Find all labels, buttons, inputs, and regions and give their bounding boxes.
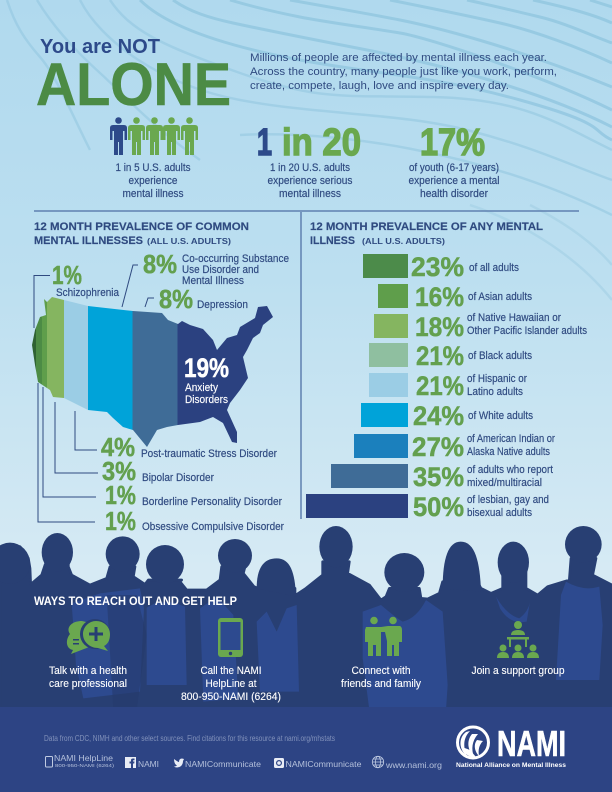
stat caption: 17%: health disorder	[420, 188, 488, 200]
action: call helpline: HelpLine at	[206, 678, 256, 690]
bar: 35% mixed	[331, 462, 553, 492]
callout: 1% schizophrenia: 1%	[52, 260, 82, 290]
stat caption: 17%: experience a mental	[408, 175, 500, 187]
bar: 23% all adults: of all adults	[469, 262, 519, 274]
intro text: Across the country, many people just like you work, perform,	[250, 66, 557, 78]
callout: 8% depression	[145, 284, 248, 314]
stat: 1 in 20: 1	[257, 122, 272, 164]
callout: 3% bipolar	[55, 402, 214, 486]
bar: 50% LGB: bisexual adults	[467, 507, 532, 519]
contact: facebook	[125, 757, 159, 769]
action: call helpline: 800-950-NAMI (6264)	[181, 691, 281, 703]
intro text: Millions of people are affected by mental illness each year.	[250, 52, 547, 64]
action: call helpline	[181, 665, 281, 703]
action: call helpline: Call the NAMI	[200, 665, 262, 677]
contact: instagram: NAMICommunicate	[286, 759, 362, 769]
callout: 1% borderline: 1%	[105, 480, 136, 510]
logo: NAMI: National Alliance on Mental Illness	[456, 762, 567, 769]
bar: 18% Native Hawaiian	[374, 312, 587, 342]
callout: 4% PTSD: 4%	[101, 432, 135, 462]
action: join group: Join a support group	[472, 665, 564, 677]
bar: 21% Hispanic: 21%	[416, 371, 464, 401]
callout: 8% co-occurring: Use Disorder and	[182, 264, 259, 276]
bar: 21% Hispanic: Latino adults	[467, 386, 523, 398]
bar: 50% LGB: 50%	[413, 492, 464, 522]
icon: phone	[218, 618, 243, 657]
bar: 21% Black	[369, 341, 532, 371]
bar: 21% Black: 21%	[416, 341, 464, 371]
callout: 19% anxiety: Disorders	[185, 394, 228, 406]
bar: 23% all adults: 23%	[411, 252, 464, 282]
bar: 27% American Indian: of American Indian or	[467, 433, 555, 445]
heading: ways to reach out: WAYS TO REACH OUT AND GET HELP	[34, 594, 237, 608]
callout: 19% anxiety: 19%	[184, 353, 229, 383]
stat caption: 1 in 5: 1 in 5 U.S. adults	[116, 162, 191, 174]
callout: 8% depression: 8%	[159, 284, 193, 314]
callout: 4% PTSD: Post-traumatic Stress Disorder	[141, 448, 277, 460]
bar: 16% Asian: 16%	[415, 282, 464, 312]
bar: 21% Hispanic	[369, 371, 527, 401]
stat caption: 1 in 5: experience	[128, 175, 178, 187]
callout: 8% co-occurring: Mental Illness	[182, 275, 244, 287]
stat caption: 1 in 5: mental illness	[122, 188, 184, 200]
callout: 1% OCD: Obsessive Compulsive Disorder	[142, 521, 284, 533]
heading: any mental illness: ILLNESS	[310, 235, 355, 247]
source note: Data from CDC, NIMH and other select sources. Find citations for this resource at nami.org/mhstats	[44, 734, 335, 743]
bar: 24% White: 24%	[413, 401, 464, 431]
heading: common mental illnesses	[34, 221, 249, 247]
intro text: create, compete, laugh, love and inspire every day.	[250, 80, 509, 92]
callout: 3% bipolar: 3%	[102, 456, 136, 486]
callout: 4% PTSD	[75, 411, 277, 462]
callout: 19% anxiety	[184, 353, 229, 406]
stat caption: 1 in 20	[268, 162, 353, 200]
title: You are NOT	[40, 36, 160, 58]
callout: 1% schizophrenia: Schizophrenia	[56, 287, 120, 299]
bar: 27% American Indian	[354, 432, 555, 462]
bar: 18% Native Hawaiian: Other Pacific Islander adults	[467, 325, 587, 337]
bar: 18% Native Hawaiian: 18%	[415, 312, 464, 342]
map: United States prevalence bands	[30, 290, 278, 450]
silhouettes of people	[0, 526, 612, 710]
bar: 21% Hispanic: of Hispanic or	[467, 373, 527, 385]
callout: 1% schizophrenia	[34, 260, 120, 328]
title: ALONE	[36, 51, 231, 118]
action: talk with a professional: care professional	[49, 678, 127, 690]
stat caption: 1 in 20: experience serious	[268, 175, 353, 187]
icon: chat bubbles	[67, 619, 110, 654]
callout: 8% co-occurring: 8%	[143, 249, 177, 279]
bar: 21% Black: of Black adults	[468, 350, 532, 362]
bar: 35% mixed: mixed/multiracial	[467, 477, 542, 489]
logo: NAMI: NAMI	[497, 723, 566, 764]
callout: 1% OCD	[38, 383, 284, 536]
bar: 50% LGB	[306, 492, 549, 522]
bar: 16% Asian: of Asian adults	[468, 291, 532, 303]
contact: helpline: NAMI HelpLine	[54, 753, 113, 763]
intro text	[250, 52, 557, 92]
stat caption: 1 in 5	[116, 162, 191, 200]
callout: 8% depression: Depression	[197, 299, 248, 311]
action: connect with friends: friends and family	[341, 678, 421, 690]
stat: 1 in 20: in 20	[282, 122, 361, 164]
bar: 24% White	[361, 401, 533, 431]
contact: helpline: 800-950-NAMI (6264)	[55, 763, 114, 769]
contact: website	[372, 756, 442, 770]
bar: 18% Native Hawaiian: of Native Hawaiian or	[467, 312, 561, 324]
callout: 19% anxiety: Anxiety	[185, 382, 218, 394]
callout: 8% co-occurring: Co-occurring Substance	[182, 253, 289, 265]
stat: 17%: 17%	[420, 122, 485, 164]
callout: 8% co-occurring	[122, 249, 289, 307]
contact: helpline	[46, 753, 114, 769]
stat caption: 17%	[408, 162, 500, 200]
action: connect with friends: Connect with	[352, 665, 410, 677]
heading: any mental illness: 12 MONTH PREVALENCE OF ANY MENTAL	[310, 221, 543, 233]
action: connect with friends	[341, 665, 421, 690]
footer panel	[0, 707, 612, 792]
icon: five people	[110, 117, 198, 155]
bar: 24% White: of White adults	[468, 410, 533, 422]
callout: 1% borderline	[43, 387, 282, 510]
contact: facebook: NAMI	[138, 759, 159, 769]
logo: NAMI	[456, 723, 567, 769]
callout: 1% borderline: Borderline Personality Disorder	[142, 496, 282, 508]
callout: 1% OCD: 1%	[105, 506, 136, 536]
callout: 3% bipolar: Bipolar Disorder	[142, 472, 214, 484]
icon: friends and family	[365, 617, 402, 656]
bar: 23% all adults	[363, 252, 519, 282]
heading: common mental illnesses: 12 MONTH PREVALENCE OF COMMON	[34, 221, 249, 233]
stat caption: 1 in 20: mental illness	[279, 188, 341, 200]
bar: 16% Asian	[378, 282, 532, 312]
heading: common mental illnesses: (ALL U.S. ADULTS)	[147, 236, 231, 246]
bar: 50% LGB: of lesbian, gay and	[467, 494, 549, 506]
contact: twitter: NAMICommunicate	[185, 759, 261, 769]
stat caption: 17%: of youth (6-17 years)	[409, 162, 499, 174]
contact: website: www.nami.org	[385, 760, 442, 770]
action: talk with a professional: Talk with a health	[49, 665, 127, 677]
heading: any mental illness	[310, 221, 543, 247]
action: talk with a professional	[49, 665, 127, 690]
heading: any mental illness: (ALL U.S. ADULTS)	[362, 236, 445, 246]
icon: support group	[497, 621, 539, 658]
stat caption: 1 in 20: 1 in 20 U.S. adults	[270, 162, 350, 174]
bar: 35% mixed: of adults who report	[467, 464, 553, 476]
bar: 27% American Indian: 27%	[412, 432, 464, 462]
bar: 35% mixed: 35%	[413, 462, 464, 492]
heading: common mental illnesses: MENTAL ILLNESSES	[34, 235, 143, 247]
bar: 27% American Indian: Alaska Native adults	[467, 446, 550, 458]
